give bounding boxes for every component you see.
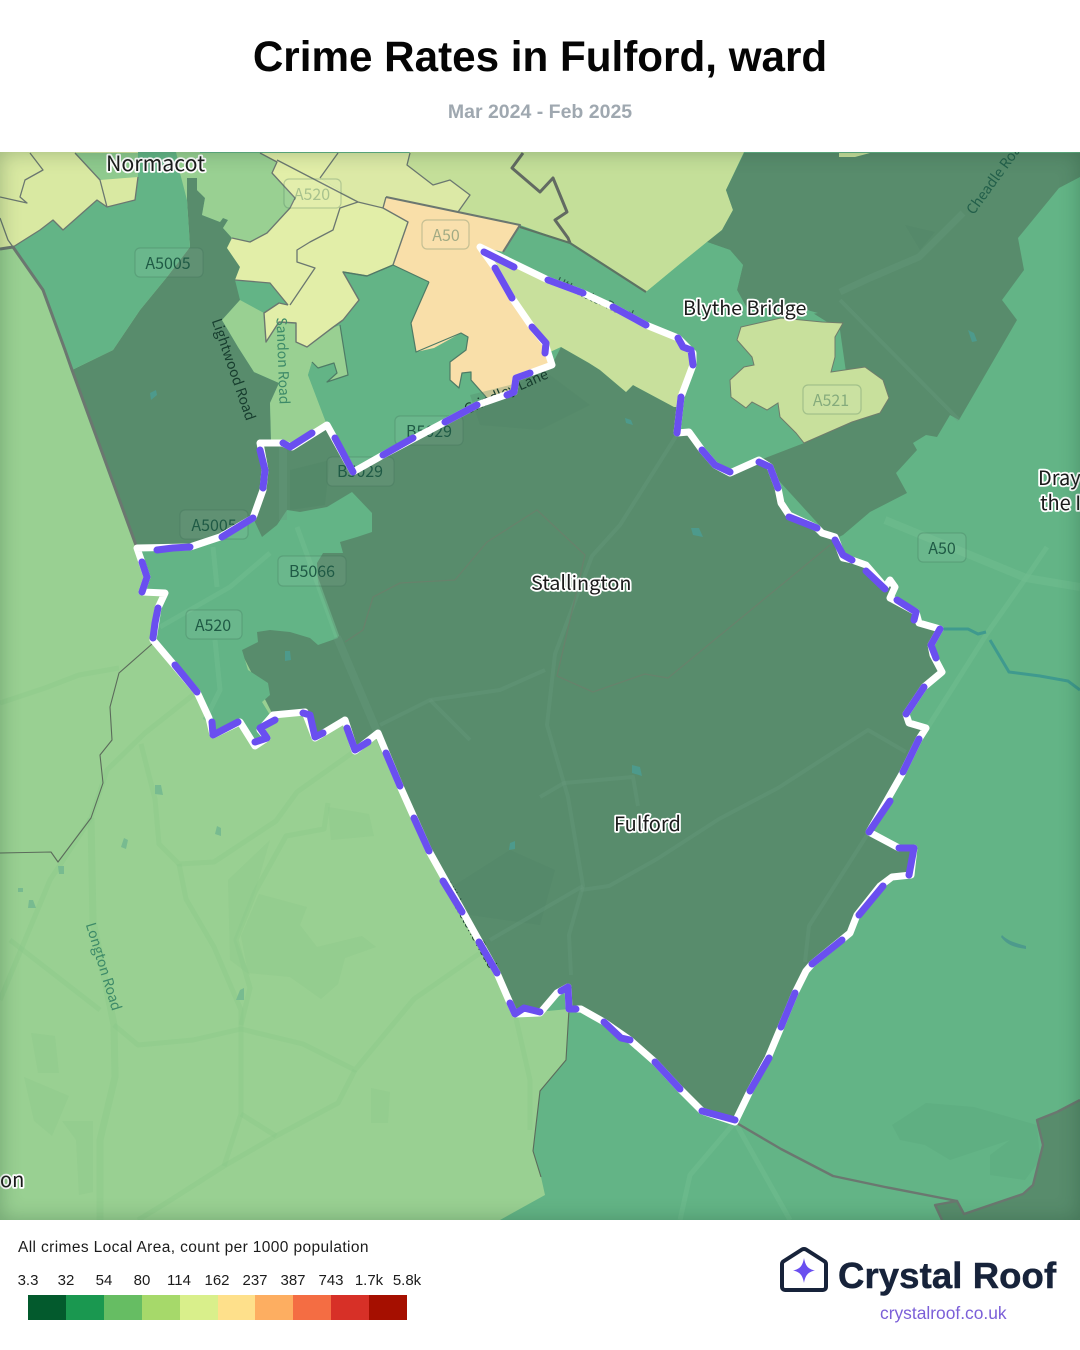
road labels: Sandon Road	[271, 317, 295, 405]
road labels: A521	[813, 387, 849, 411]
faint roads: light areas	[0, 668, 530, 1220]
road labels: A520	[294, 181, 330, 205]
legend tick labels: 54	[96, 1272, 112, 1289]
map edge shading	[0, 152, 1080, 1220]
road labels: A5005	[191, 512, 237, 536]
legend colour bar	[28, 1295, 407, 1320]
area: orange high-crime ward	[383, 197, 552, 400]
title: Crime Rates in Fulford, ward	[253, 33, 827, 80]
brand name: Crystal Roof	[838, 1255, 1056, 1296]
place labels: Blythe Bridge	[683, 292, 806, 321]
area: Normacot light green	[75, 153, 138, 180]
road labels: Grindley Lane	[461, 364, 551, 419]
ward boundary: white line	[137, 247, 942, 1122]
legend tick labels: 162	[204, 1272, 230, 1289]
icon: crystal roof house logo	[780, 1247, 828, 1292]
legend tick labels: 1.7k	[355, 1272, 383, 1289]
ponds: light area	[18, 785, 244, 1000]
area: ward west medium green patch	[137, 492, 372, 746]
road labels: B5029	[406, 418, 452, 442]
area: pale north	[320, 153, 470, 212]
road labels: A50	[928, 535, 956, 559]
area: medium band by Blythe Bridge	[480, 225, 818, 473]
choropleth map	[0, 152, 1080, 1220]
area: north yellow-green	[386, 152, 744, 292]
area: light green strip	[222, 300, 348, 447]
area: Blythe Bridge patch	[730, 318, 889, 443]
road labels: Longton Road	[81, 920, 127, 1013]
area: south-east dark corner	[935, 1100, 1080, 1220]
map area: medium green base	[0, 152, 1080, 1220]
legend tick labels: 387	[280, 1272, 306, 1289]
area: pale centre	[227, 153, 408, 347]
subtitle: date range: Mar 2024 - Feb 2025	[448, 101, 632, 123]
water features	[150, 330, 1080, 949]
legend tick labels: 237	[242, 1272, 268, 1289]
area: medium green north of Grindley Lane	[308, 265, 492, 472]
place labels: on	[0, 1164, 24, 1193]
road labels: B5066	[289, 558, 335, 582]
place labels: Fulford	[614, 808, 681, 837]
road labels: Lightwood Road	[207, 316, 261, 423]
legend tick labels	[18, 1272, 422, 1289]
woodland shading	[24, 225, 1040, 1195]
road labels: A520	[195, 612, 231, 636]
website url: crystalroof.co.uk	[880, 1303, 1007, 1323]
area: top-left pale	[0, 152, 138, 249]
legend tick labels: 80	[134, 1272, 150, 1289]
legend tick labels: 5.8k	[393, 1272, 421, 1289]
faint roads: medium areas	[160, 520, 1080, 1220]
road labels: Uttoxeter Road	[553, 273, 636, 323]
road labels: A5005	[145, 250, 191, 274]
road shields	[135, 179, 966, 639]
road labels: B5029	[337, 458, 383, 482]
place labels	[0, 147, 1080, 1193]
road labels	[81, 134, 1030, 1013]
faint roads: dark ward	[283, 213, 963, 975]
boundaries: grey admin lines	[0, 153, 1080, 1220]
legend heading: All crimes Local Area, count per 1000 population	[18, 1239, 369, 1256]
legend tick labels: 32	[58, 1272, 74, 1289]
area: yellow-green strip in ward	[480, 247, 693, 407]
legend tick labels: 3.3	[18, 1272, 38, 1289]
place labels: Dray	[1038, 462, 1080, 491]
area: top-centre light green	[177, 153, 295, 242]
area: south-west light green	[0, 152, 569, 1220]
area: top pale sliver	[839, 153, 870, 157]
area: dark main ward and west	[72, 178, 942, 1122]
area: north-east dark	[707, 153, 1080, 540]
road labels: Hilderstone Road	[439, 878, 501, 971]
place labels: Stallington	[531, 567, 632, 596]
road labels: A50	[432, 222, 460, 246]
legend tick labels: 743	[318, 1272, 344, 1289]
legend tick labels: 114	[167, 1272, 191, 1289]
ward boundary: purple dashes	[142, 252, 940, 1120]
place labels: the I	[1040, 487, 1080, 516]
area: west medium green	[13, 152, 190, 370]
